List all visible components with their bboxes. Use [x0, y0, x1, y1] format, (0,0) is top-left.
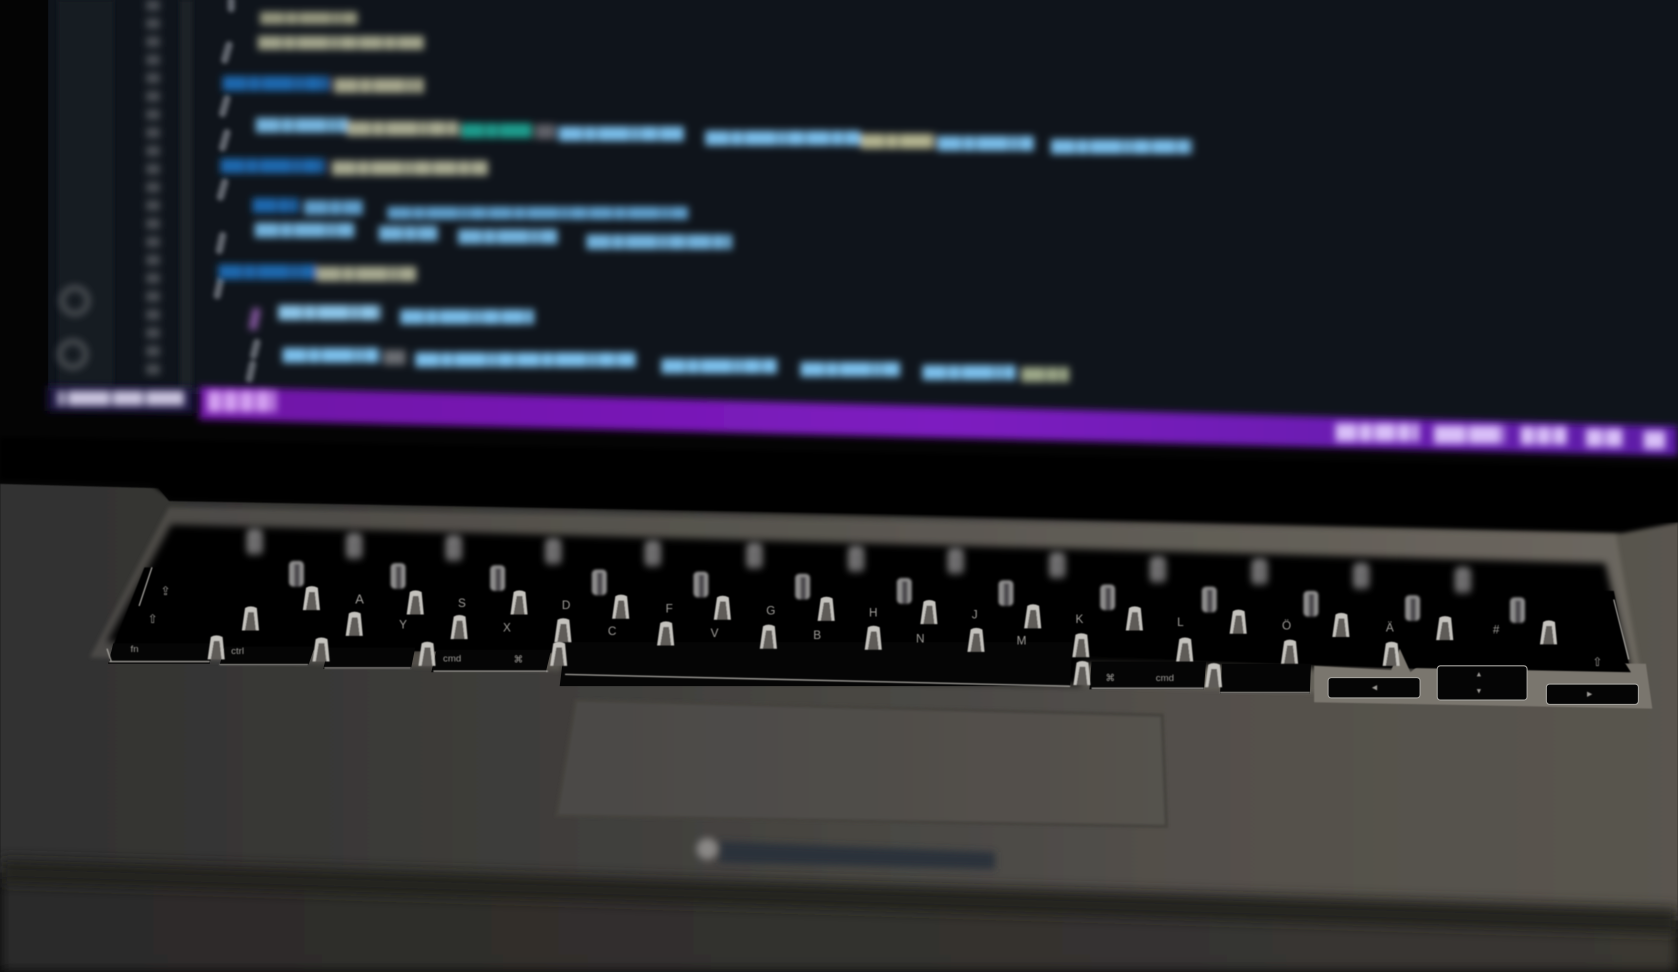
- third row key gaps: [303, 586, 1557, 644]
- code fold markers: [217, 0, 257, 379]
- key legends: N: [916, 632, 925, 645]
- left purple chip: [208, 391, 276, 411]
- top row key gaps: [247, 529, 1470, 593]
- keyboard well highlight: [90, 507, 1646, 702]
- key legends: cmd: [443, 654, 461, 665]
- fourth row key gaps: [242, 606, 1400, 666]
- key legends: ⇪: [161, 585, 170, 598]
- key legends: ▸: [1587, 688, 1593, 700]
- key legends: ctrl: [231, 646, 244, 657]
- key legends: fn: [131, 644, 139, 655]
- purple status bar: [199, 386, 1678, 456]
- keyboard bright edges: [107, 567, 1629, 693]
- laptop body: [0, 437, 1678, 921]
- key legends: ⇧: [1592, 656, 1602, 669]
- key legends: D: [562, 599, 570, 612]
- key legends: S: [458, 597, 466, 610]
- gutter line numbers: [147, 0, 160, 380]
- editor sidebar: [58, 0, 113, 388]
- key legends: K: [1076, 613, 1084, 626]
- key legends: A: [355, 592, 364, 607]
- second row key gaps: [289, 561, 1525, 623]
- key legends: ⌘: [1105, 673, 1115, 684]
- key legends: ▾: [1477, 686, 1482, 696]
- key legends: M: [1017, 634, 1026, 647]
- bottom row keys: [108, 642, 1311, 694]
- key legends: Ä: [1386, 622, 1394, 635]
- keyboard: [107, 525, 1652, 709]
- key legends: V: [711, 627, 719, 640]
- key legends: J: [972, 609, 978, 622]
- bottom row key gaps: [208, 635, 1222, 687]
- front edge: [0, 859, 1678, 972]
- black keys block: [107, 525, 1631, 685]
- sleep light glint: [697, 838, 718, 860]
- trackpad: [556, 700, 1166, 826]
- left status text: [58, 391, 186, 405]
- key legends: cmd: [1156, 673, 1174, 684]
- key legends: [131, 585, 1602, 700]
- thumb notch: [697, 838, 995, 869]
- key legends: X: [503, 622, 511, 635]
- gutter line: [180, 0, 193, 392]
- key legends: Ö: [1282, 619, 1291, 632]
- sidebar icons: [60, 288, 88, 367]
- right status items: [1336, 432, 1665, 440]
- shift keys: [1408, 632, 1631, 672]
- arrow keys: [1328, 666, 1638, 704]
- key legends: ⇧: [148, 613, 158, 626]
- hinge shadow: [0, 437, 1678, 533]
- key legends: L: [1177, 616, 1184, 629]
- blurred code lines: [218, 18, 1192, 375]
- key legends: B: [813, 629, 821, 642]
- key legends: F: [666, 602, 673, 615]
- key legends: ▴: [1477, 669, 1482, 679]
- screen panel: [48, 0, 1678, 428]
- shadow line under lid edge: [0, 872, 1678, 923]
- key legends: C: [608, 625, 617, 638]
- silver frame around arrows: [1314, 649, 1652, 709]
- key legends: H: [869, 607, 877, 620]
- key legends: #: [1493, 624, 1500, 637]
- key legends: ⌘: [514, 655, 523, 666]
- left status block: [47, 385, 195, 413]
- key legends: Y: [399, 618, 407, 631]
- key legends: G: [766, 604, 775, 617]
- status bar: [47, 385, 1678, 456]
- key legends: ◂: [1372, 681, 1378, 693]
